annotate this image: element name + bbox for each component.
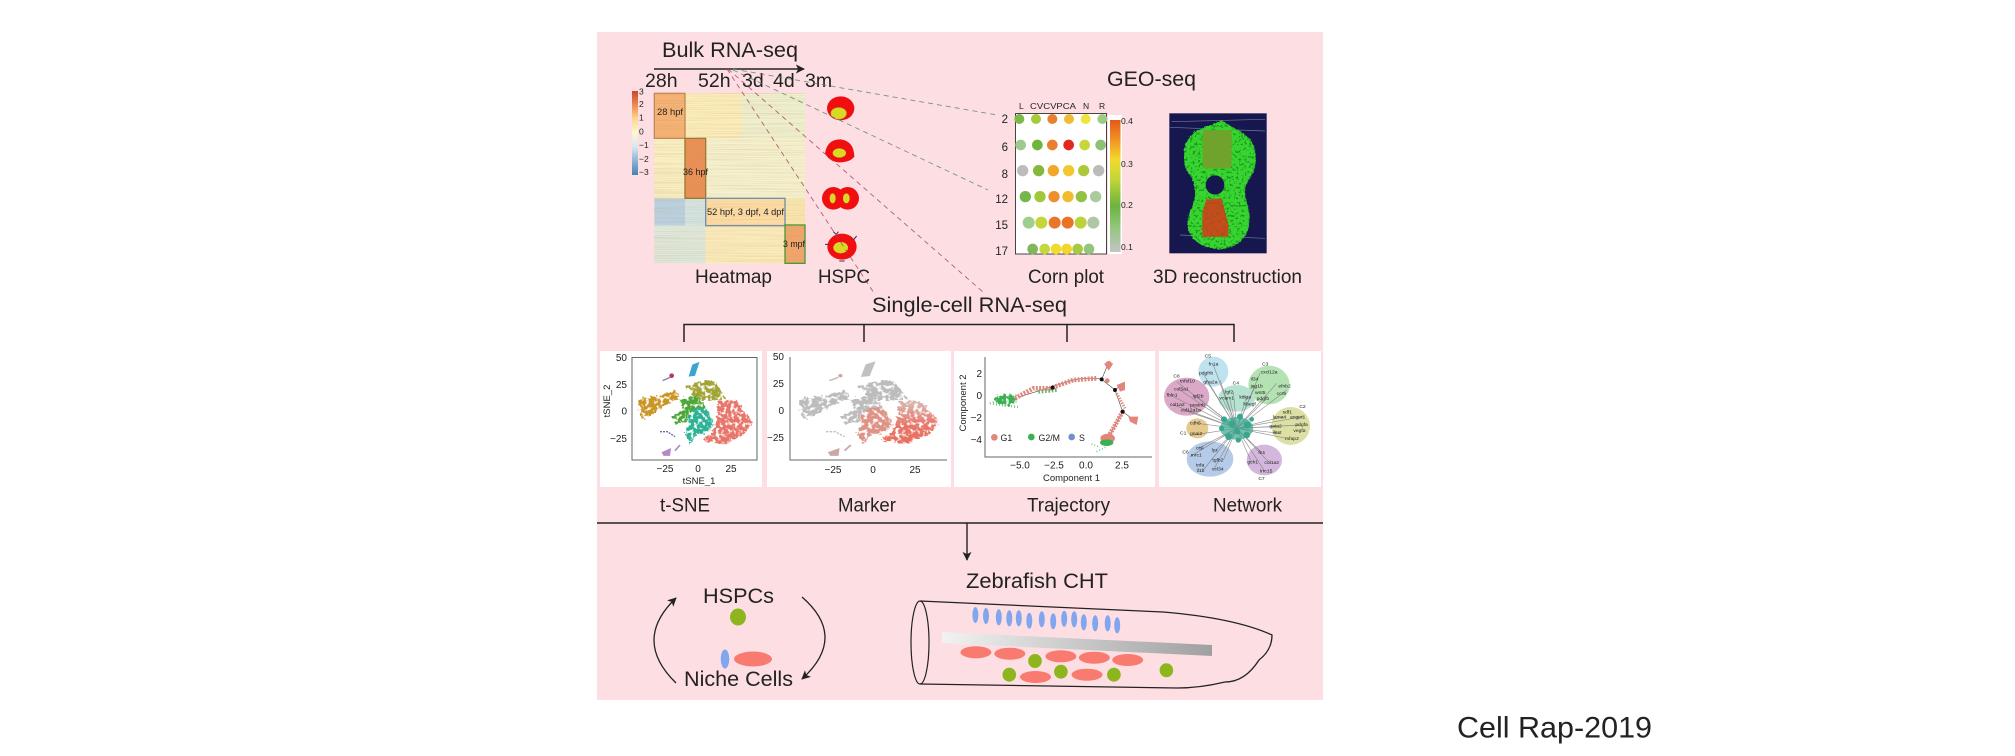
network gene labels: il1b bbox=[1197, 468, 1205, 474]
network gene labels: col1a2 bbox=[1170, 402, 1185, 408]
network gene labels: col12a1a bbox=[1181, 407, 1201, 413]
panel: Marker plot: 25 bbox=[909, 465, 921, 476]
corn plot colour scale: 0.4 bbox=[1121, 116, 1133, 126]
network gene labels: sdf1 bbox=[1283, 409, 1292, 415]
network gene labels: gfra2a bbox=[1203, 379, 1218, 385]
network gene labels: hbegf bbox=[1243, 401, 1256, 407]
corn plot: 12 bbox=[995, 194, 1008, 206]
network gene labels: lrrc15 bbox=[1260, 469, 1273, 475]
corn plot: CVCVPCA bbox=[1030, 101, 1076, 111]
section divider bbox=[597, 522, 1323, 524]
network gene labels: jag1b bbox=[1250, 383, 1263, 389]
bulk section captions bbox=[695, 267, 1302, 288]
bracket connector bbox=[684, 324, 1234, 342]
panel: Trajectory plot: −2 bbox=[971, 413, 982, 424]
corn plot: R bbox=[1099, 101, 1105, 111]
network gene labels: wnt5 bbox=[1255, 390, 1266, 396]
network gene labels: tgfb2 bbox=[1212, 457, 1224, 463]
icon: blue niche cell bbox=[721, 650, 729, 668]
panel: t-SNE plot: 25 bbox=[725, 464, 737, 475]
network gene labels: il34 bbox=[1251, 377, 1259, 383]
panel: Network plot bbox=[1159, 351, 1321, 487]
panel: Marker plot: −25 bbox=[825, 465, 842, 476]
corn plot colour scale bbox=[1108, 115, 1133, 254]
network gene labels: igf2b bbox=[1193, 393, 1204, 399]
network gene labels: pdgfa bbox=[1295, 422, 1308, 428]
corn plot: N bbox=[1083, 101, 1089, 111]
panel: t-SNE plot: tSNE_2 bbox=[602, 385, 613, 417]
network gene labels bbox=[1167, 353, 1308, 482]
panel: Trajectory plot: Component 1 bbox=[1043, 473, 1100, 484]
panel: t-SNE plot: 0 bbox=[695, 464, 701, 475]
panel: Marker plot: 25 bbox=[773, 379, 784, 390]
panel: Trajectory plot: −4 bbox=[971, 435, 982, 446]
heatmap colour legend: −1 bbox=[639, 140, 649, 150]
trajectory legend bbox=[1000, 433, 1085, 443]
corn plot: 6 bbox=[1002, 142, 1008, 154]
label: HSPCs: HSPCs bbox=[703, 585, 774, 608]
heatmap cluster labels: 28 hpf bbox=[657, 107, 683, 117]
label: Niche Cells: Niche Cells bbox=[684, 668, 793, 691]
panel: t-SNE plot: 25 bbox=[616, 380, 627, 391]
heading: GEO-seq: GEO-seq bbox=[1107, 68, 1196, 91]
marker clusters bbox=[801, 363, 940, 455]
network gene labels: cxcl12a bbox=[1261, 369, 1278, 375]
heatmap cluster labels: 3 mpf bbox=[783, 239, 805, 249]
arrow: HSPC to niche bbox=[802, 597, 825, 679]
timeline labels: 3m bbox=[805, 70, 832, 92]
citation: Cell Rap-2019 bbox=[1457, 712, 1652, 744]
heatmap colour legend: 3 bbox=[639, 86, 644, 96]
network gene labels: C5 bbox=[1205, 353, 1211, 359]
heatmap cluster labels bbox=[657, 107, 805, 249]
heading: Zebrafish CHT: Zebrafish CHT bbox=[966, 570, 1108, 593]
panel: Trajectory plot: 2 bbox=[976, 369, 982, 380]
arrow: down to CHT bbox=[966, 523, 968, 560]
network gene labels: C1 bbox=[1180, 431, 1187, 437]
network gene labels: C7 bbox=[1258, 476, 1265, 482]
heatmap colour legend: −3 bbox=[639, 167, 649, 177]
corn plot colour scale: 0.1 bbox=[1121, 242, 1133, 252]
panel: t-SNE plot: −25 bbox=[657, 464, 674, 475]
heatmap cluster labels: 36 hpf bbox=[683, 167, 708, 177]
single-cell captions: Trajectory bbox=[1027, 496, 1110, 516]
panel: Trajectory plot: −5.0 bbox=[1010, 460, 1030, 472]
panel: Marker plot: −25 bbox=[767, 433, 784, 444]
network gene labels: vcam1 bbox=[1219, 395, 1234, 401]
network gene labels: gch1 bbox=[1247, 459, 1258, 465]
panel: Marker plot bbox=[767, 351, 951, 487]
panel: t-SNE plot: 50 bbox=[616, 353, 627, 364]
corn plot: 8 bbox=[1002, 169, 1008, 181]
single-cell captions: t-SNE bbox=[660, 496, 710, 516]
network gene labels: efnb2 bbox=[1278, 383, 1291, 389]
heatmap colour legend bbox=[632, 86, 649, 177]
timeline labels bbox=[645, 70, 832, 92]
single-cell captions: Network bbox=[1213, 496, 1282, 516]
panel: Trajectory plot: 2.5 bbox=[1115, 460, 1129, 472]
panel: Trajectory plot: 0 bbox=[976, 391, 982, 402]
trajectory legend: G2/M bbox=[1038, 433, 1060, 443]
network gene labels: mfap2 bbox=[1285, 436, 1299, 442]
panel: Trajectory plot bbox=[954, 351, 1155, 487]
network gene labels: cdh5 bbox=[1190, 421, 1201, 427]
network gene labels: fn1 bbox=[1258, 450, 1265, 456]
network gene labels: fbln1 bbox=[1167, 393, 1178, 399]
panel: Marker plot: 50 bbox=[773, 352, 784, 363]
network gene labels: fgf2 bbox=[1225, 389, 1234, 395]
timeline labels: 4d bbox=[773, 70, 795, 92]
network gene labels: angpt1 bbox=[1290, 415, 1305, 421]
corn plot colour scale: 0.2 bbox=[1121, 200, 1133, 210]
bulk section captions: 3D reconstruction bbox=[1153, 267, 1302, 288]
arrow: timeline bbox=[654, 68, 804, 70]
trajectory legend: S bbox=[1079, 433, 1085, 443]
corn plot colour scale: 0.3 bbox=[1121, 159, 1133, 169]
bulk section captions: Corn plot bbox=[1028, 267, 1105, 288]
panel: t-SNE plot: −25 bbox=[610, 434, 627, 445]
panel: t-SNE plot bbox=[600, 351, 762, 487]
corn plot: 2 bbox=[1002, 114, 1008, 126]
zebrafish CHT diagram bbox=[911, 601, 1272, 688]
network gene labels: C4 bbox=[1233, 381, 1239, 387]
network gene labels: lama4 bbox=[1273, 415, 1286, 421]
heatmap colour legend: −2 bbox=[639, 154, 649, 164]
corn plot: L bbox=[1019, 101, 1024, 111]
network gene labels: fn1a bbox=[1209, 361, 1219, 367]
bulk section captions: Heatmap bbox=[695, 267, 772, 288]
network gene labels: col1a2 bbox=[1264, 460, 1279, 466]
network gene labels: gata2 bbox=[1269, 423, 1282, 429]
heading: Bulk RNA-seq: Bulk RNA-seq bbox=[662, 39, 798, 62]
network gene labels: col5a1 bbox=[1174, 387, 1189, 393]
icon: salmon niche cell bbox=[734, 652, 772, 666]
timeline labels: 3d bbox=[742, 70, 764, 92]
timeline labels: 28h bbox=[645, 70, 678, 92]
timeline labels: 52h bbox=[698, 70, 731, 92]
corn plot bbox=[995, 101, 1107, 258]
network gene labels: ctsl bbox=[1196, 445, 1203, 451]
3D reconstruction image bbox=[1169, 113, 1267, 253]
panel: t-SNE plot: 0 bbox=[621, 406, 627, 418]
t-SNE clusters bbox=[640, 363, 752, 455]
panel: Trajectory plot: −2.5 bbox=[1044, 460, 1064, 472]
network gene labels: tnfsf10 bbox=[1180, 379, 1195, 385]
network gene labels: C6 bbox=[1182, 449, 1189, 455]
network gene labels: C3 bbox=[1262, 361, 1269, 367]
network gene labels: pdgfb bbox=[1257, 396, 1269, 402]
corn plot: 15 bbox=[995, 220, 1008, 232]
trajectory path and cells bbox=[990, 361, 1138, 452]
network gene labels: vegfa bbox=[1293, 428, 1306, 434]
panel: Marker plot: 0 bbox=[778, 406, 784, 417]
network gene labels: mrc1 bbox=[1191, 453, 1202, 459]
network gene labels: gnai2 bbox=[1190, 431, 1202, 437]
heatmap colour legend: 2 bbox=[639, 99, 644, 109]
network gene labels: tnfa bbox=[1196, 463, 1205, 469]
heatmap colour legend: 1 bbox=[639, 112, 644, 122]
network gene labels: C8 bbox=[1173, 373, 1180, 379]
panel: Marker plot: 0 bbox=[870, 465, 876, 476]
network gene labels: postnb bbox=[1190, 403, 1205, 409]
panel: Trajectory plot: Component 2 bbox=[958, 374, 969, 432]
icon: HSPC cell bbox=[730, 608, 746, 626]
trajectory legend: G1 bbox=[1000, 433, 1012, 443]
HSPC niche cycle bbox=[654, 585, 825, 691]
network gene labels: ccr9 bbox=[1277, 391, 1286, 397]
heatmap bbox=[654, 93, 805, 263]
dashed connector lines bbox=[727, 69, 997, 293]
heatmap colour legend: 0 bbox=[639, 126, 644, 136]
icons: HSPC embryo sections bbox=[822, 96, 859, 261]
network gene labels: pdgfrb bbox=[1199, 371, 1213, 377]
network gene labels: lyz bbox=[1212, 447, 1218, 453]
network gene labels: ccl34 bbox=[1212, 467, 1224, 473]
corn plot: 17 bbox=[995, 246, 1008, 258]
heading: Single-cell RNA-seq: Single-cell RNA-seq bbox=[872, 294, 1067, 317]
network gene labels: C2 bbox=[1299, 404, 1306, 410]
panel: Trajectory plot: 0.0 bbox=[1079, 460, 1093, 472]
network gene labels: kitlga bbox=[1239, 395, 1251, 401]
bulk section captions: HSPC bbox=[818, 267, 870, 288]
gray notochord bar bbox=[942, 632, 1212, 656]
panel: t-SNE plot: tSNE_1 bbox=[683, 476, 715, 487]
network gene labels: il6st bbox=[1273, 430, 1282, 436]
single-cell captions bbox=[660, 496, 1282, 516]
arrow: niche to HSPC bbox=[654, 598, 676, 683]
single-cell captions: Marker bbox=[838, 496, 897, 516]
heatmap cluster labels: 52 hpf, 3 dpf, 4 dpf bbox=[707, 207, 784, 217]
panel: pink background bbox=[597, 32, 1323, 700]
